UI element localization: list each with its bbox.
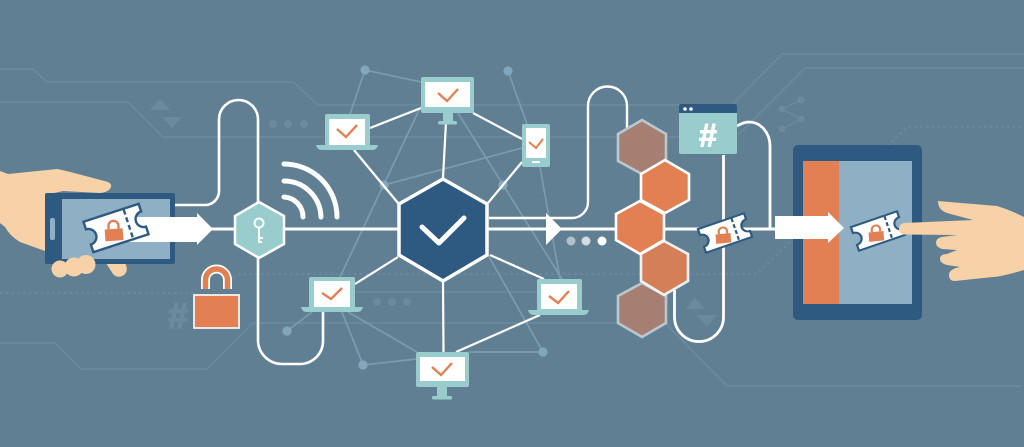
right hand pointing (899, 201, 1024, 281)
faint network links (287, 70, 562, 365)
smartphone (45, 193, 175, 264)
browser window with hash: # (699, 118, 717, 154)
device: smartphone (522, 124, 550, 167)
background circuit lines (0, 54, 1024, 386)
device: lower left laptop (301, 277, 363, 312)
ticket on line (698, 213, 752, 253)
fingers over phone (52, 255, 96, 278)
icon: key hexagon (235, 202, 284, 258)
network nodes (282, 65, 548, 370)
central check hexagon (399, 179, 487, 281)
ticket on phone (83, 204, 149, 252)
device: lower right laptop (528, 279, 589, 315)
white network links (354, 108, 544, 352)
device: top monitor (421, 77, 474, 124)
device: bottom monitor (416, 352, 469, 400)
background decorative icons: # (168, 295, 188, 336)
hexagon cluster (616, 120, 689, 337)
white arrow into tablet (775, 212, 844, 243)
left hand holding phone (0, 169, 111, 251)
icon: wifi signal (284, 164, 337, 217)
device: upper laptop (316, 114, 378, 150)
tablet (793, 145, 922, 320)
progress dots (566, 236, 606, 246)
browser window with hash (679, 104, 737, 154)
background decorative icons (150, 96, 804, 336)
main flow lines (175, 86, 776, 364)
white arrow from phone (125, 213, 213, 245)
flow arrowhead (546, 213, 562, 245)
padlock (194, 269, 239, 328)
hand thumb behind phone (106, 263, 127, 277)
ticket on tablet (851, 211, 905, 251)
